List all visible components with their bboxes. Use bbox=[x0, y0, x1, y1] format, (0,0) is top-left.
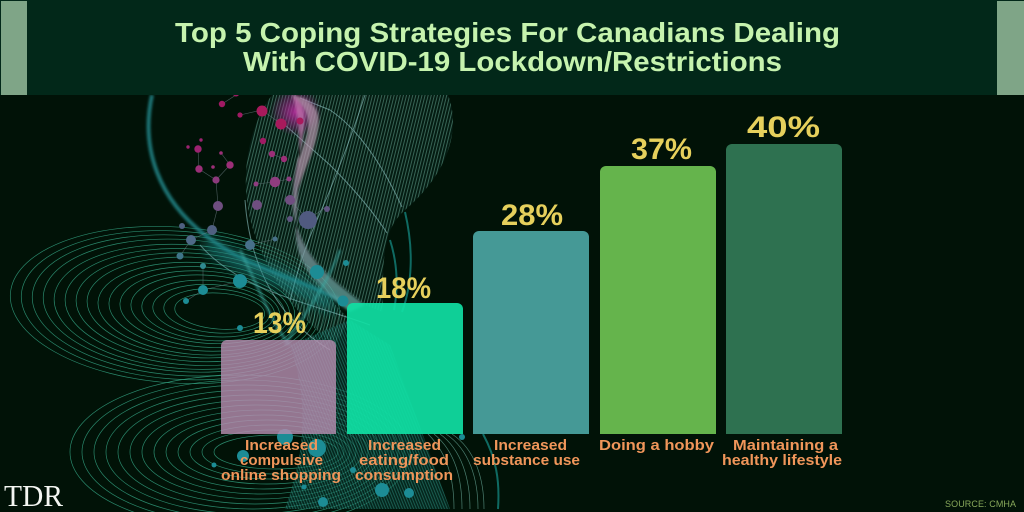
source note: SOURCE: CMHA bbox=[945, 499, 1016, 509]
category labels: Doing a hobby bbox=[599, 437, 715, 454]
upper contour rings bbox=[5, 216, 345, 394]
lower right arcs bbox=[428, 434, 484, 509]
bar: hobby 37% bbox=[600, 166, 716, 434]
value labels: 18% bbox=[376, 272, 431, 305]
category labels: Maintaining a bbox=[733, 437, 839, 454]
network dots bbox=[176, 90, 465, 507]
right mesh body bbox=[295, 95, 453, 312]
lower mesh body bbox=[285, 320, 450, 509]
left accent block bbox=[1, 1, 27, 95]
network links bbox=[180, 95, 327, 301]
category labels: healthy lifestyle bbox=[722, 452, 842, 469]
value labels: 13% bbox=[253, 307, 306, 340]
value labels: 37% bbox=[631, 133, 692, 166]
category labels: consumption bbox=[355, 467, 453, 484]
bar: eating 18% bbox=[347, 303, 463, 434]
value labels: 28% bbox=[501, 199, 563, 232]
value labels: 40% bbox=[747, 111, 820, 144]
bar: substance use 28% bbox=[473, 231, 589, 434]
left mesh band bbox=[246, 95, 350, 345]
pink glow bbox=[270, 88, 322, 136]
logo: TDR: TDR bbox=[4, 478, 63, 512]
pale ribbon bbox=[292, 95, 365, 312]
category labels: compulsive bbox=[240, 452, 323, 469]
teal glow band bbox=[205, 235, 335, 312]
category labels: Increased bbox=[245, 437, 318, 454]
lower contour rings bbox=[70, 375, 410, 512]
bar chart bbox=[221, 111, 842, 484]
title: With COVID-19 Lockdown/Restrictions bbox=[243, 46, 782, 77]
category labels bbox=[221, 437, 842, 484]
category labels: Increased bbox=[494, 437, 567, 454]
value labels bbox=[253, 111, 820, 340]
category labels: substance use bbox=[473, 452, 580, 469]
bar: healthy lifestyle 40% bbox=[726, 144, 842, 434]
header band bbox=[0, 0, 1024, 95]
right accent block bbox=[997, 1, 1024, 95]
category labels: Increased bbox=[368, 437, 441, 454]
category labels: online shopping bbox=[221, 467, 341, 484]
title bbox=[175, 17, 840, 77]
category labels: eating/food bbox=[359, 452, 449, 469]
crossing light lines bbox=[200, 95, 402, 350]
teal arc bbox=[149, 95, 340, 300]
title: Top 5 Coping Strategies For Canadians Dealing bbox=[175, 17, 840, 48]
bar: online shopping 13% bbox=[221, 340, 336, 434]
teal verticals bbox=[390, 212, 498, 509]
background: line-art waves and network bbox=[5, 88, 498, 512]
